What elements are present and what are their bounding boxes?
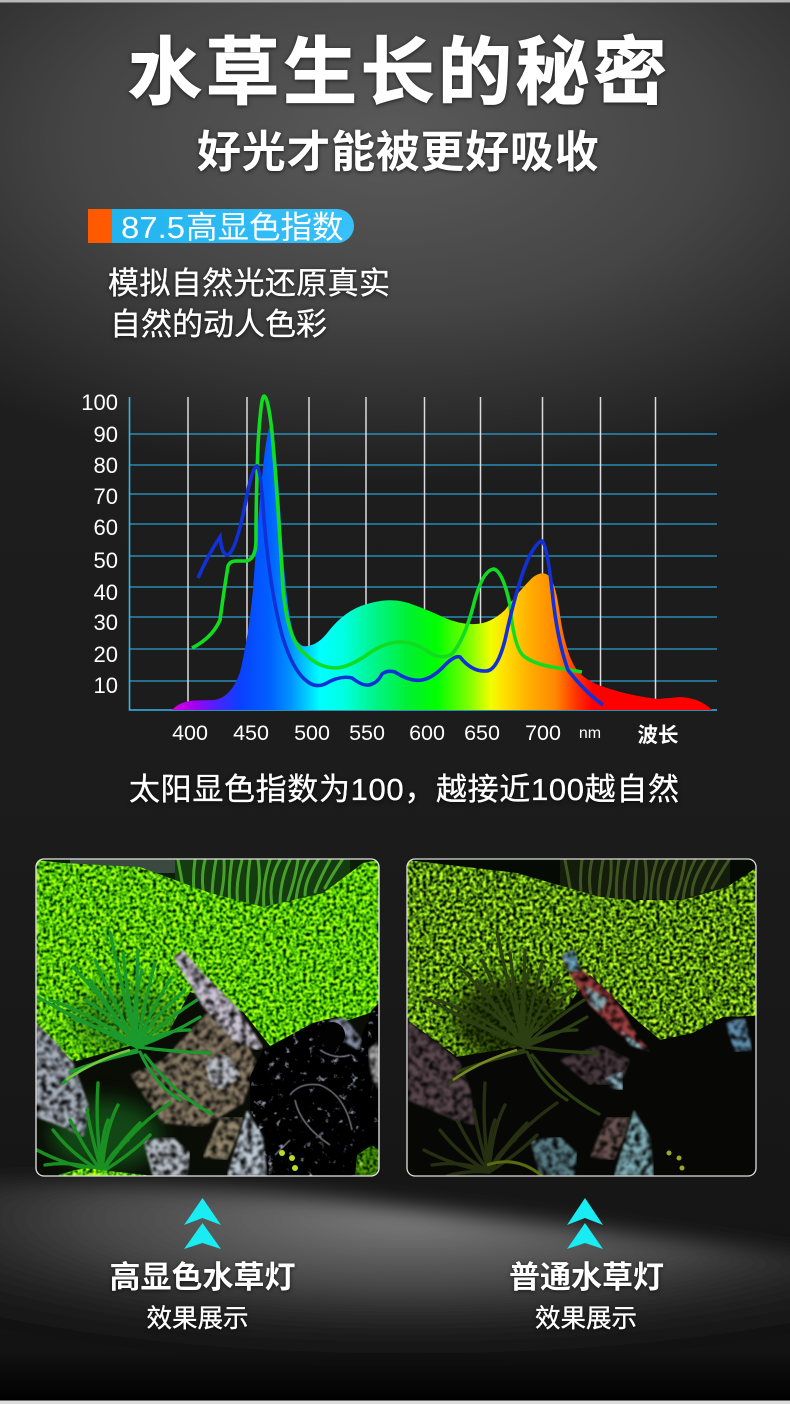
x axis labels: 650 bbox=[464, 721, 500, 745]
rocks left photo bbox=[36, 1023, 90, 1137]
description text bbox=[108, 266, 390, 342]
x axis labels: 400 bbox=[172, 721, 208, 745]
photo: ordinary light bbox=[407, 859, 756, 1176]
icon: double arrow left bbox=[184, 1198, 221, 1249]
y axis labels: 90 bbox=[94, 422, 118, 447]
y axis labels bbox=[81, 390, 118, 698]
spectrum fill bbox=[172, 424, 712, 710]
label: high color rendering lamp: 高显色水草灯 bbox=[110, 1260, 296, 1295]
x axis labels: 550 bbox=[349, 721, 385, 745]
x axis labels: nm bbox=[579, 725, 601, 742]
badge: 87.5 color rendering index: 87.5 bbox=[121, 210, 185, 245]
rocks right photo bbox=[408, 1021, 475, 1125]
y axis labels: 10 bbox=[94, 673, 118, 698]
label: ordinary lamp: 效果展示 bbox=[535, 1305, 637, 1333]
x axis labels: 600 bbox=[409, 721, 445, 745]
label: high color rendering lamp: 效果展示 bbox=[146, 1305, 249, 1333]
x axis labels bbox=[172, 721, 678, 747]
x axis labels: 500 bbox=[294, 721, 330, 745]
chart grid bbox=[129, 397, 717, 710]
y axis labels: 40 bbox=[94, 580, 118, 605]
green curve bbox=[192, 396, 582, 672]
y axis labels: 80 bbox=[94, 453, 118, 478]
title: 水草生长的秘密 bbox=[128, 31, 670, 114]
label: high color rendering lamp bbox=[110, 1260, 296, 1333]
y axis labels: 60 bbox=[94, 515, 118, 540]
x axis labels: 700 bbox=[525, 721, 561, 745]
y axis labels: 50 bbox=[94, 548, 118, 573]
badge: 87.5 color rendering index: 高显色指数 bbox=[186, 209, 344, 245]
y axis labels: 30 bbox=[94, 610, 118, 635]
description text: 模拟自然光还原真实 bbox=[108, 266, 390, 301]
badge: 87.5 color rendering index bbox=[88, 209, 354, 245]
x axis labels: 波长 bbox=[638, 724, 678, 747]
description text: 自然的动人色彩 bbox=[110, 307, 327, 342]
photo: high color rendering light bbox=[36, 859, 379, 1176]
label: ordinary lamp bbox=[509, 1260, 664, 1333]
spectrum chart bbox=[81, 390, 717, 747]
caption: 太阳显色指数为100，越接近100越自然 bbox=[129, 772, 679, 807]
x axis labels: 450 bbox=[233, 721, 269, 745]
y axis labels: 100 bbox=[81, 390, 118, 415]
y axis labels: 20 bbox=[94, 642, 118, 667]
icon: double arrow right bbox=[567, 1198, 603, 1249]
label: ordinary lamp: 普通水草灯 bbox=[509, 1260, 664, 1295]
subtitle: 好光才能被更好吸收 bbox=[197, 128, 599, 177]
blue curve bbox=[198, 466, 603, 705]
y axis labels: 70 bbox=[94, 484, 118, 509]
